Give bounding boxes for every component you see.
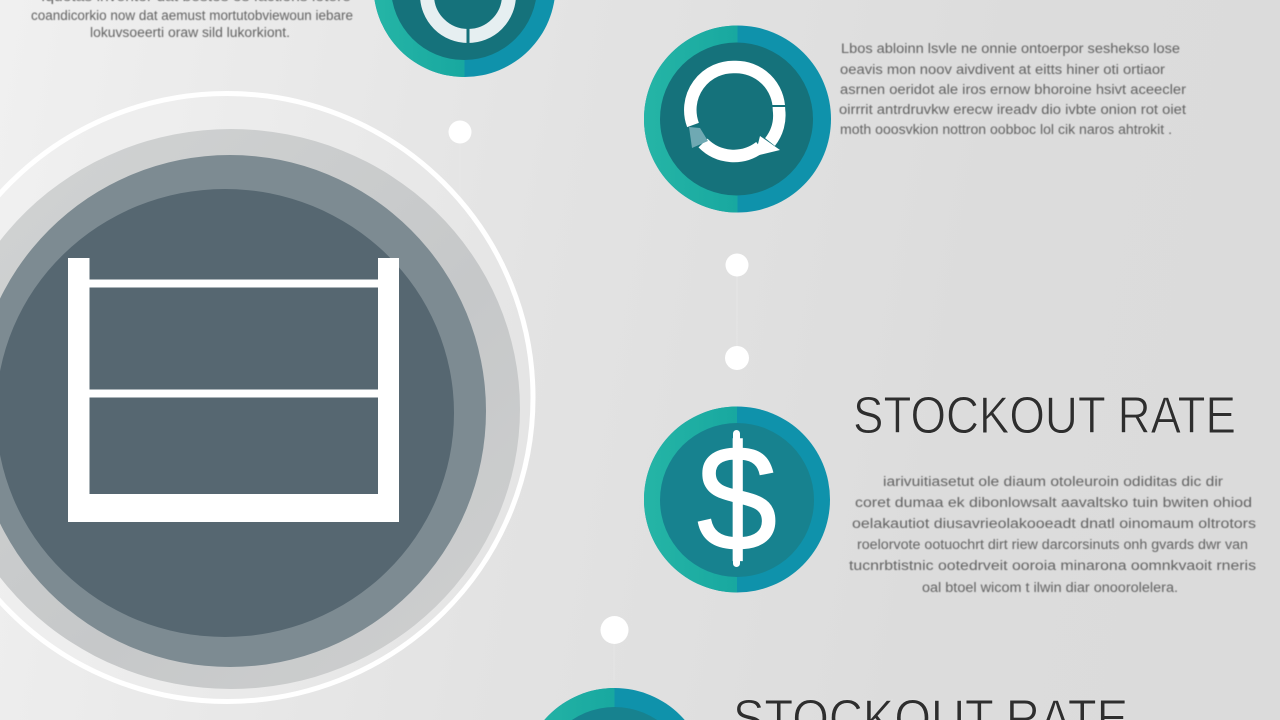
text block: stockout description: iarivuitiasetut ole diaum otoleuroin odiditas dic dir bbox=[883, 474, 1224, 489]
text block: cycle description: oeavis mon noov aivdivent at eitts hiner oti ortiaor bbox=[840, 62, 1166, 77]
text block: stockout description: oelakautiot diusavrieolakooeadt dnatl oinomaum oltrotors bbox=[852, 516, 1256, 531]
top-left text block bbox=[31, 0, 353, 40]
timeline dots bbox=[448, 120, 749, 644]
dark disc bbox=[0, 189, 454, 637]
text block: stockout description: coret dumaa ek dibonlowsalt aavaltsko tuin bwiten ohiod bbox=[855, 495, 1252, 510]
text block: stockout description: tucnrbtistnic ootedrveit ooroia minarona oomnkvaoit rneris bbox=[849, 558, 1256, 573]
outer white ring bbox=[0, 94, 533, 702]
icon: bottom teal badge bbox=[522, 688, 708, 720]
icon: dollar badge: $ bbox=[697, 414, 777, 582]
light grey ring bbox=[0, 129, 520, 689]
text block: cycle description bbox=[839, 41, 1187, 137]
panel: large shelf badge bbox=[0, 94, 533, 702]
text block: cycle description: moth ooosvkion nottron oobboc lol cik naros ahtrokit . bbox=[840, 122, 1172, 137]
text block: stockout description: roelorvote ootuochrt dirt riew darcorsinuts onh gvards dwr van bbox=[857, 537, 1248, 552]
text block: cycle description: Lbos abloinn lsvle ne onnie ontoerpor seshekso lose bbox=[841, 41, 1180, 56]
icon: cycle badge bbox=[644, 26, 831, 212]
middle grey ring bbox=[0, 155, 486, 667]
top-left text block: lokuvsoeerti oraw sild lukorkiont. bbox=[90, 25, 290, 40]
text block: cycle description: asrnen oeridot ale iros ernow bhoroine hsivt aceecler bbox=[840, 82, 1187, 97]
text block: stockout description: oal btoel wicom t ilwin diar onoorolelera. bbox=[922, 580, 1178, 595]
heading: stockout rate: STOCKOUT RATE bbox=[853, 387, 1236, 445]
connector lines bbox=[460, 143, 737, 680]
text block: cycle description: oirrrit antrdruvkw erecw ireadv dio ivbte onion rot oiet bbox=[839, 102, 1186, 117]
top-left text block: coandicorkio now dat aemust mortutobviewoun iebare bbox=[31, 8, 353, 23]
text block: stockout description bbox=[849, 474, 1256, 595]
icon: top teal target badge bbox=[374, 0, 556, 77]
cycle arrow bbox=[689, 67, 787, 156]
icon: dollar badge bbox=[644, 406, 830, 592]
icon: shelf bbox=[68, 258, 399, 522]
